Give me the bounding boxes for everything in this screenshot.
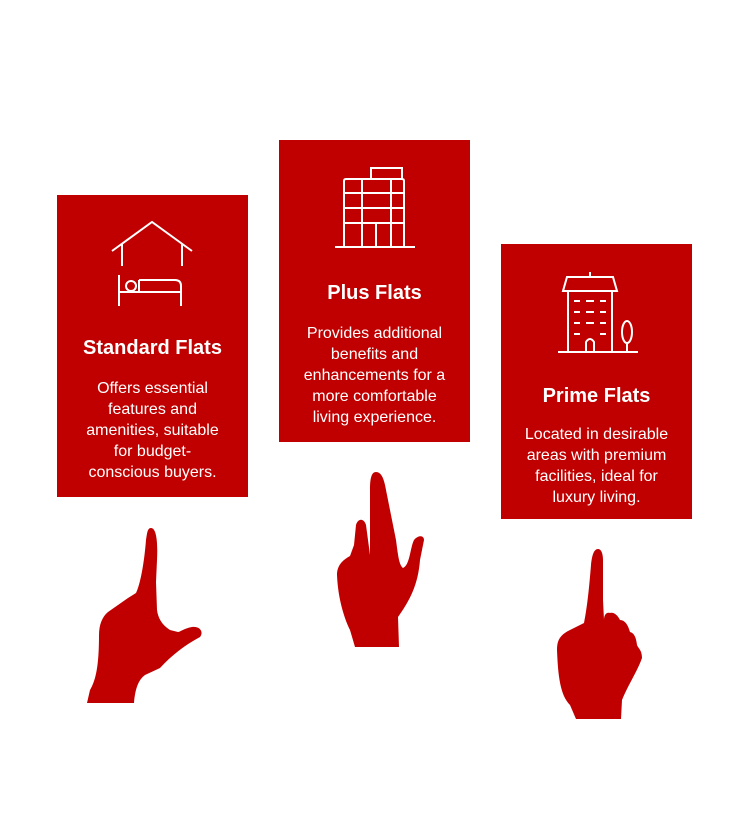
text: description: areas with premium xyxy=(527,447,666,464)
hand: left xyxy=(87,528,202,703)
text: description: features and xyxy=(108,401,197,418)
text: description xyxy=(86,380,219,481)
heading: Prime Flats: Prime Flats xyxy=(543,385,650,407)
hand: middle xyxy=(337,472,424,647)
text: description: benefits and xyxy=(331,346,418,363)
heading: Standard Flats: Standard Flats xyxy=(83,337,222,359)
icon: apartment with tree xyxy=(558,272,638,353)
text: description: for budget- xyxy=(114,443,191,460)
text: description: Located in desirable xyxy=(525,426,668,443)
text: description: more comfortable xyxy=(312,388,437,405)
text: description: living experience. xyxy=(313,409,436,426)
text: description: Offers essential xyxy=(97,380,208,397)
panel: standard flats xyxy=(57,195,248,497)
text: description xyxy=(525,426,668,506)
text: description: conscious buyers. xyxy=(88,464,217,481)
text: description: luxury living. xyxy=(552,489,641,506)
text: description xyxy=(304,325,446,426)
text: description: enhancements for a xyxy=(304,367,445,384)
text: description: amenities, suitable xyxy=(86,422,219,439)
heading: Plus Flats: Plus Flats xyxy=(327,282,422,304)
icon: house with bed xyxy=(112,220,192,306)
panel: plus flats xyxy=(279,140,470,442)
hand: right xyxy=(557,549,642,719)
text: description: Provides additional xyxy=(307,325,442,342)
text: description: facilities, ideal for xyxy=(535,468,658,485)
icon: office building xyxy=(335,167,415,248)
panel: prime flats xyxy=(501,244,692,519)
